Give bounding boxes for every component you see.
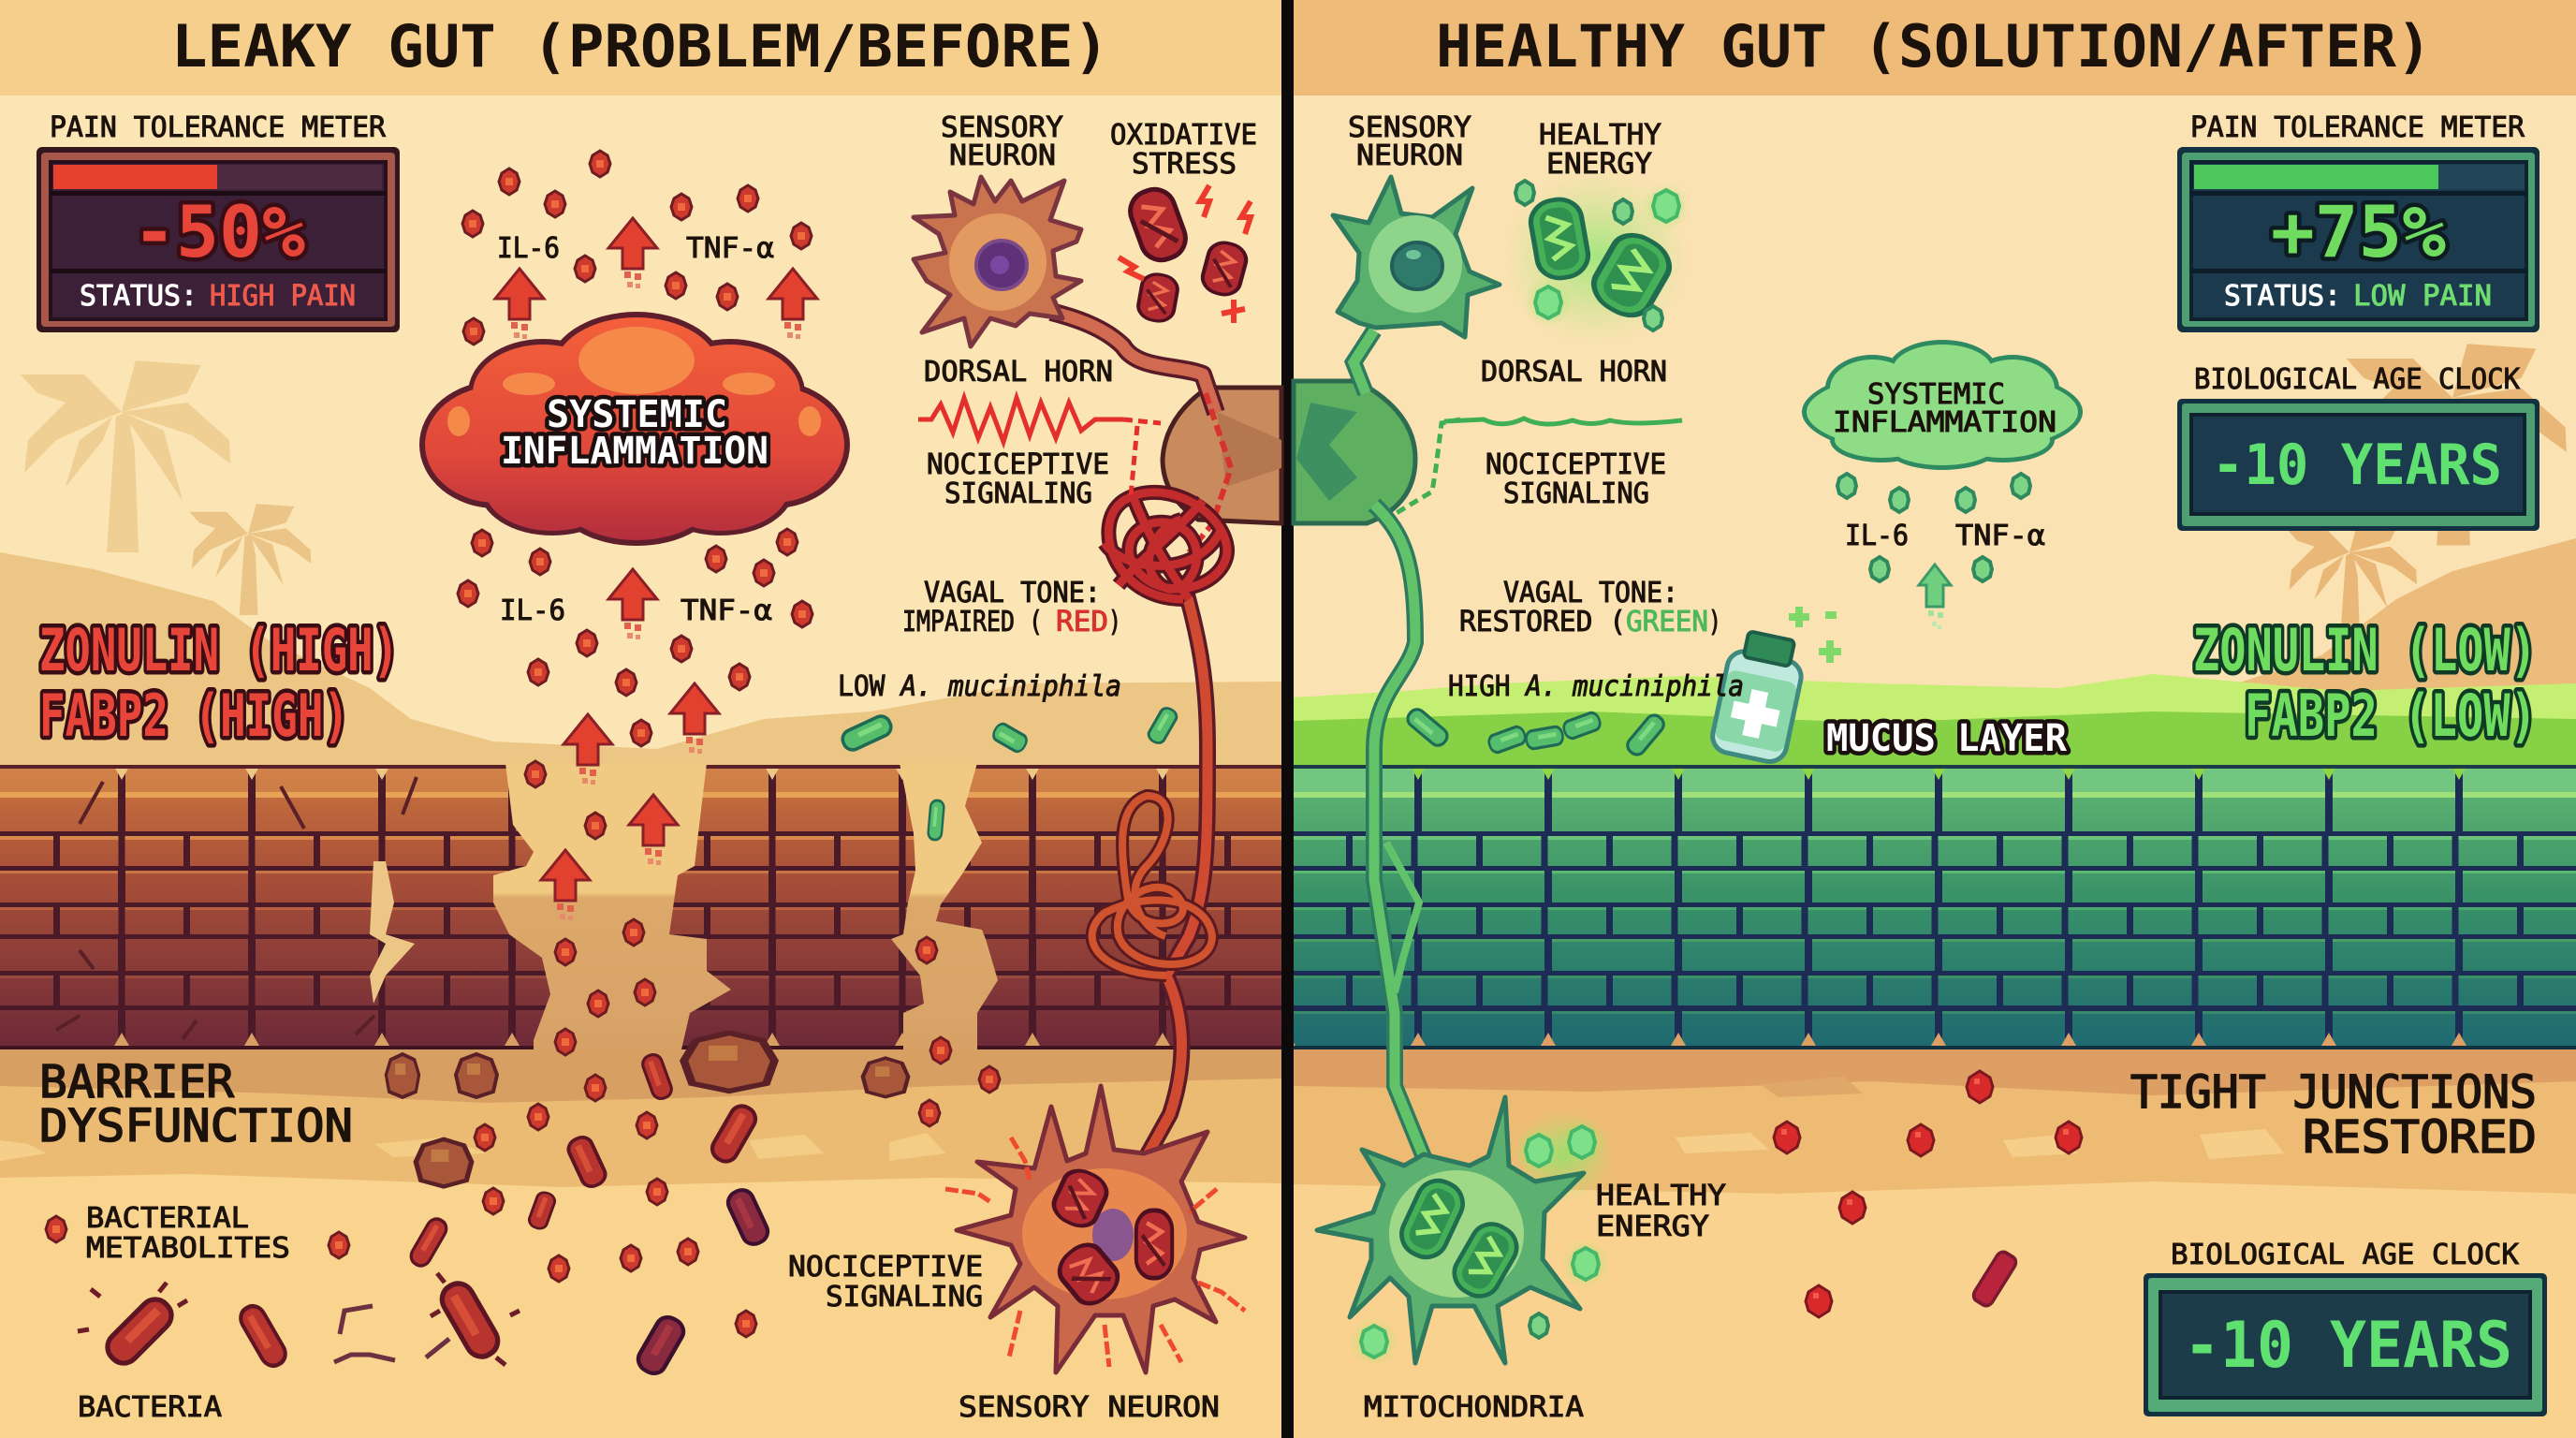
- label: pain tolerance meter right: PAIN TOLERANCE METER: [2190, 111, 2525, 144]
- label: closing paren: ): [1108, 606, 1121, 638]
- divider: [1281, 0, 1294, 1438]
- label: vagal tone right: VAGAL TONE:: [1503, 577, 1678, 609]
- label: nociceptive: NOCICEPTIVE: [927, 448, 1109, 481]
- dorsal horn left: [1163, 388, 1281, 523]
- icon: palm tree right: [2347, 344, 2567, 545]
- header band left: [0, 0, 1281, 95]
- signal: calm green line: [1395, 418, 1682, 514]
- label: vagal tone: VAGAL TONE:: [924, 577, 1101, 609]
- panel: biological age clock upper: [2177, 363, 2539, 531]
- label: TNF-alpha lower: TNF-α: [681, 594, 772, 627]
- label: nociceptive right: NOCICEPTIVE: [1486, 448, 1666, 481]
- label: IL-6 right: IL-6: [1845, 520, 1909, 552]
- dorsal horn shading: [1217, 412, 1281, 487]
- label: dysfunction: DYSFUNCTION: [39, 1100, 353, 1152]
- label: energy: ENERGY: [1546, 148, 1652, 181]
- wall breach centre: [493, 763, 731, 1049]
- dorsal horn right: [1294, 381, 1415, 523]
- label: neuron: NEURON: [949, 139, 1056, 172]
- label: energy lower: ENERGY: [1596, 1211, 1709, 1243]
- panel: biological age clock lower: [2144, 1239, 2547, 1416]
- label: mucus layer: MUCUS LAYER: [1826, 717, 2068, 760]
- title right: HEALTHY GUT (SOLUTION/AFTER): [1436, 12, 2432, 81]
- label: pain tolerance meter: PAIN TOLERANCE METER: [50, 111, 387, 144]
- arrows upward: [495, 218, 817, 920]
- label: signaling lower: SIGNALING: [826, 1281, 983, 1313]
- cloud label line 2: INFLAMMATION: [501, 430, 768, 473]
- label: mitochondria: MITOCHONDRIA: [1364, 1391, 1584, 1424]
- label: biological age clock lower: BIOLOGICAL AGE CLOCK: [2171, 1239, 2519, 1271]
- label: sensory neuron: SENSORY: [941, 111, 1063, 144]
- icon: inflamed sensory neuron: [945, 1086, 1245, 1372]
- green cloud label line 2: INFLAMMATION: [1833, 406, 2056, 439]
- clock value upper: -10 YEARS: [2212, 433, 2502, 498]
- icon: palm tree large: [21, 360, 230, 552]
- label: high muciniphila: HIGH A. muciniphila: [1448, 670, 1744, 703]
- icon: plus sparkles: [1789, 607, 1841, 663]
- scattered cytokine particles upper: [458, 151, 812, 696]
- label: low muciniphila: LOW A. muciniphila: [838, 670, 1121, 703]
- status label: STATUS:: [2224, 280, 2341, 313]
- wall breach right: [891, 763, 998, 1049]
- title left: LEAKY GUT (PROBLEM/BEFORE): [171, 12, 1109, 81]
- label: zonulin high: ZONULIN (HIGH): [39, 616, 399, 684]
- icon: palm tree right small: [2287, 521, 2417, 639]
- label: nociceptive lower: NOCICEPTIVE: [788, 1251, 983, 1284]
- label: IL-6 lower: IL-6: [500, 594, 565, 627]
- icon: bacteria group: [78, 1273, 520, 1370]
- label: sensory neuron lower: SENSORY NEURON: [959, 1391, 1220, 1424]
- meter bar fill red: [53, 165, 217, 189]
- icon: healthy sensory neuron: [1333, 177, 1500, 337]
- label: healthy: HEALTHY: [1539, 119, 1661, 152]
- cloud: systemic inflammation green: [1802, 340, 2083, 470]
- wall crack: [370, 861, 415, 1004]
- icon: damaged mitochondria oxidative stress: [1119, 183, 1251, 324]
- cloud label line 1: SYSTEMIC: [547, 393, 727, 436]
- meter value: -50%: [133, 190, 305, 273]
- label: green: GREEN: [1626, 606, 1708, 638]
- nerve knot upper: [1105, 492, 1227, 599]
- header band right: [1294, 0, 2576, 95]
- nerve: vagal nerve left: [1051, 312, 1231, 1156]
- brick wall: intestinal barrier left: [0, 765, 1281, 1049]
- icon: sensory neuron damaged: [914, 177, 1081, 346]
- status label: STATUS:: [80, 280, 198, 313]
- label: oxidative: OXIDATIVE: [1110, 119, 1257, 152]
- green arrow fading: [1919, 565, 1951, 629]
- label: bacterial: BACTERIAL: [86, 1202, 249, 1235]
- label: dorsal horn: DORSAL HORN: [924, 356, 1113, 389]
- panel: pain tolerance meter left: [37, 111, 400, 332]
- label: closing paren right: ): [1708, 606, 1721, 638]
- label: restored: RESTORED (: [1459, 606, 1626, 638]
- label: tight junctions: TIGHT JUNCTIONS: [2130, 1066, 2537, 1119]
- label: signaling: SIGNALING: [944, 477, 1092, 510]
- label: fabp2 high: FABP2 (HIGH): [39, 682, 349, 750]
- green bacteria left: [840, 706, 1179, 841]
- cloud: systemic inflammation red: [419, 312, 850, 546]
- mucus layer band: [1294, 674, 2576, 767]
- status value: LOW PAIN: [2353, 280, 2492, 313]
- label: impaired: IMPAIRED (: [902, 606, 1043, 638]
- label: red: RED: [1056, 606, 1108, 638]
- icon: healthy mitochondria: [1502, 169, 1690, 346]
- label: TNF-alpha upper: TNF-α: [686, 232, 774, 265]
- label: biological age clock upper: BIOLOGICAL AGE CLOCK: [2194, 363, 2520, 396]
- clock value lower: -10 YEARS: [2184, 1309, 2512, 1383]
- leaked particles and debris: [46, 720, 1000, 1378]
- icon: probiotic bottle: [1709, 628, 1808, 765]
- meter bar fill green: [2194, 165, 2438, 189]
- meter value: +75%: [2271, 190, 2446, 273]
- green cloud label line 1: SYSTEMIC: [1867, 378, 2005, 411]
- panel: pain tolerance meter right: [2177, 111, 2539, 332]
- label: dorsal horn right: DORSAL HORN: [1481, 356, 1667, 389]
- nerve: vagal nerve right: [1354, 330, 1424, 1157]
- panel: leaky gut background: [0, 0, 1281, 1438]
- label: restored line: RESTORED: [2303, 1111, 2537, 1164]
- label: neuron right: NEURON: [1356, 139, 1463, 172]
- label: sensory right: SENSORY: [1348, 111, 1471, 144]
- green cytokine dots: [1837, 474, 2030, 581]
- signal: nociceptive zigzag: [918, 398, 1161, 496]
- label: metabolites: METABOLITES: [86, 1232, 290, 1265]
- icon: palm tree small: [189, 504, 311, 615]
- label: stress: STRESS: [1132, 148, 1237, 181]
- label: bacteria: BACTERIA: [78, 1391, 222, 1424]
- icon: healthy neuron with mitochondria: [1317, 1097, 1615, 1366]
- status value: HIGH PAIN: [210, 280, 356, 313]
- remaining red particles right: [1774, 1071, 2082, 1317]
- panel: healthy gut background: [1294, 0, 2576, 1438]
- green bacteria on mucus: [1404, 706, 1667, 758]
- brick wall: intestinal barrier right: [1294, 765, 2576, 1049]
- label: signaling right: SIGNALING: [1503, 477, 1649, 510]
- label: TNF-alpha right: TNF-α: [1955, 520, 2045, 552]
- dorsal horn shading right: [1296, 403, 1357, 501]
- label: healthy energy lower: HEALTHY: [1596, 1180, 1726, 1212]
- nerve knot lower: [1092, 796, 1212, 976]
- label: barrier: BARRIER: [39, 1056, 234, 1108]
- label: IL-6 upper: IL-6: [497, 232, 560, 265]
